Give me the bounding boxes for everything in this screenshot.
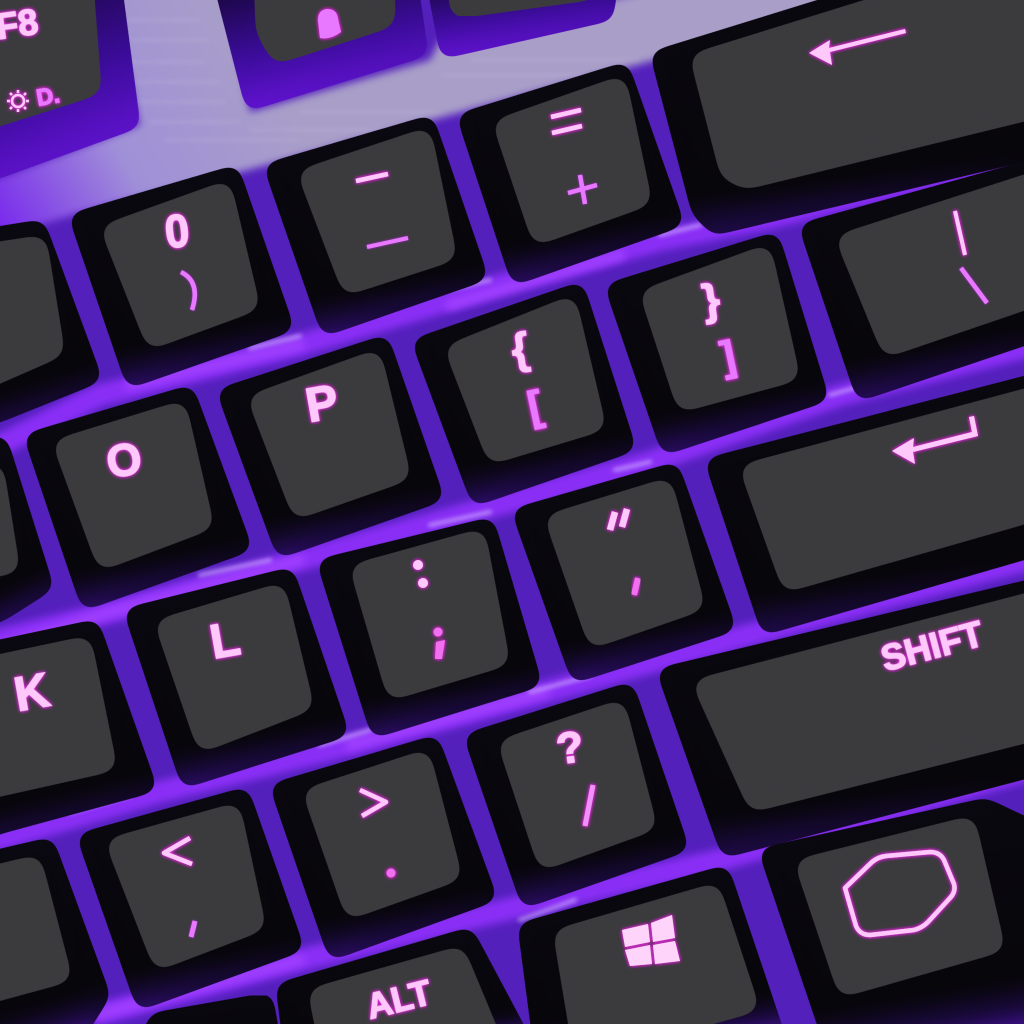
label: backslash xyxy=(961,268,987,303)
key: open brace xyxy=(422,292,626,496)
key: 0 xyxy=(79,175,284,378)
label: dash lower xyxy=(367,238,408,247)
key: enter xyxy=(715,380,1024,625)
label: semicolon xyxy=(434,628,445,659)
label: 0: 0 xyxy=(162,204,192,258)
key: backspace xyxy=(660,0,1024,226)
label: slash xyxy=(585,785,593,826)
label: period xyxy=(386,868,396,878)
label: K: K xyxy=(10,664,54,722)
key: bottom left xyxy=(0,847,101,1024)
key: cooler master logo xyxy=(769,807,1024,1024)
key: windows xyxy=(527,875,779,1024)
label: dash upper xyxy=(356,174,388,181)
icon: windows xyxy=(622,915,680,966)
label: parenthesis xyxy=(181,272,195,310)
label: question: ? xyxy=(553,722,587,774)
key: backslash xyxy=(809,165,1024,391)
key: minus xyxy=(274,125,478,326)
label: apostrophe xyxy=(634,578,638,595)
key: F8 xyxy=(0,0,132,180)
key: L xyxy=(134,577,339,778)
key: semicolon xyxy=(327,527,532,728)
arrow: enter xyxy=(892,416,978,464)
key: I partial xyxy=(0,445,44,623)
key: shift xyxy=(667,585,1024,848)
label: open bracket: [ xyxy=(523,382,547,430)
brushed silver plate xyxy=(0,0,880,240)
key: O xyxy=(34,395,242,600)
key: bottom partial xyxy=(147,1002,272,1024)
key: top partial xyxy=(432,0,612,50)
key: less than xyxy=(87,797,294,1000)
key: lock xyxy=(218,0,420,102)
label: plus xyxy=(568,175,597,204)
key: close brace xyxy=(615,242,819,445)
label: pipe xyxy=(955,211,965,255)
label: D: D. xyxy=(34,81,62,111)
label: less than xyxy=(164,838,192,864)
label: colon xyxy=(413,560,428,588)
key: K row partial top xyxy=(0,229,92,423)
key: ALT xyxy=(285,937,524,1024)
gap highlights xyxy=(70,225,980,920)
label: comma xyxy=(191,921,195,937)
icon: logo xyxy=(845,852,954,935)
label: P: P xyxy=(302,375,342,433)
label: O: O xyxy=(102,432,146,488)
label: close brace: } xyxy=(699,275,723,325)
icon: brightness xyxy=(7,90,29,112)
key: quote xyxy=(522,472,726,673)
key: question xyxy=(474,692,679,898)
key: K xyxy=(0,629,147,835)
key: equals xyxy=(467,72,674,275)
key: greater than xyxy=(280,745,487,950)
label: open brace: { xyxy=(508,324,532,374)
label: SHIFT: SHIFT xyxy=(876,613,988,679)
label: close bracket: ] xyxy=(716,332,740,380)
key: P xyxy=(227,345,434,548)
label: greater than xyxy=(360,790,386,816)
icon: lock xyxy=(318,9,341,38)
label: equals xyxy=(551,110,582,133)
arrow: backspace xyxy=(809,29,906,65)
label: L: L xyxy=(206,612,244,670)
label: double quote xyxy=(610,509,627,530)
